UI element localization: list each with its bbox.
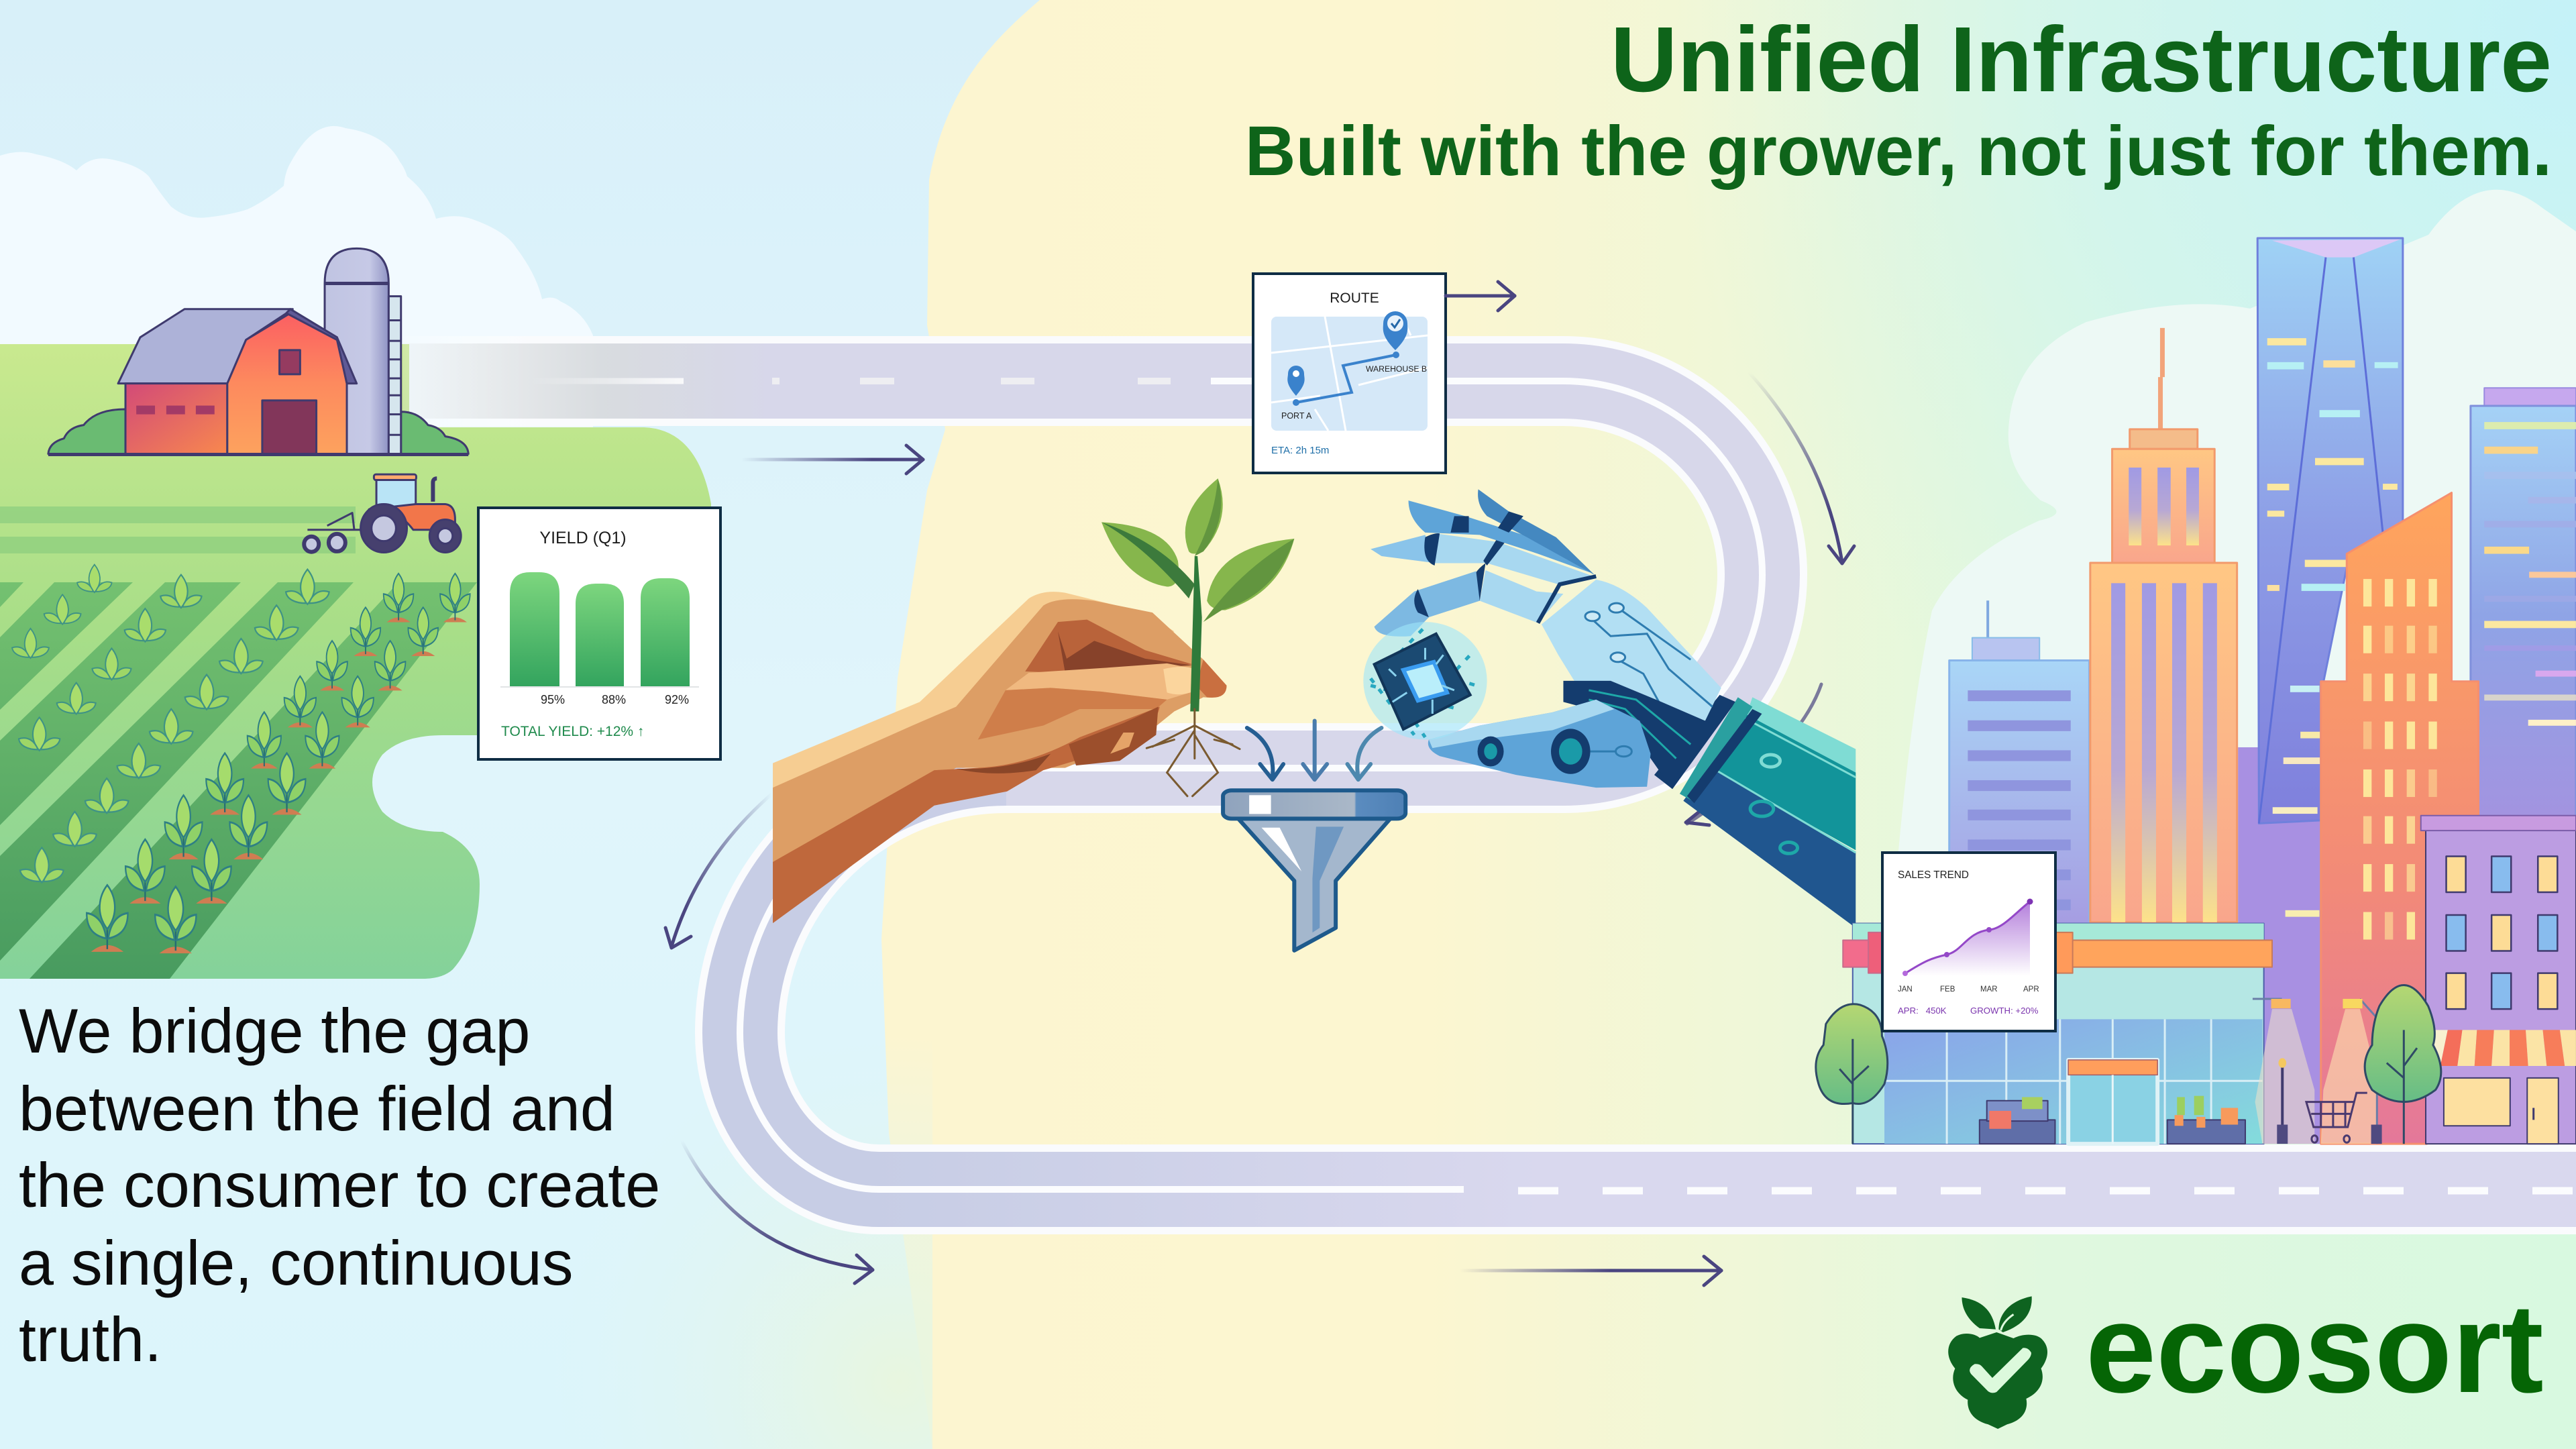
body text: a single, continuous	[19, 1228, 573, 1298]
robot arm and hand	[1371, 489, 1856, 928]
tree: left	[1816, 1004, 1888, 1144]
AI chip with glow	[1363, 622, 1487, 740]
arrow: top road direction	[741, 445, 923, 474]
plants: young sprouts	[12, 565, 329, 883]
plants: rows with soil mounds	[87, 574, 470, 953]
human hand holding seedling	[773, 592, 1227, 923]
card: yield chart: TOTAL YIELD: +12% ↑	[501, 724, 644, 739]
arrow: lower left curve	[682, 1140, 873, 1283]
card: sales trend: FEB	[1940, 985, 1955, 994]
farm field	[0, 344, 711, 979]
arrow: behind robot hand	[1686, 684, 1821, 825]
crop rows	[0, 582, 477, 979]
seedling	[1102, 478, 1294, 796]
tractor	[304, 474, 461, 552]
logo wordmark: ecosort	[2086, 1278, 2544, 1419]
card: sales trend: GROWTH: +20%	[1970, 1006, 2039, 1016]
street furniture	[2253, 999, 2382, 1144]
funnel input arrows	[1247, 720, 1381, 780]
body text: truth.	[19, 1304, 162, 1375]
arrow: right curve	[1749, 372, 1854, 564]
body text: between the field and	[19, 1073, 615, 1144]
body text: We bridge the gap	[19, 996, 530, 1066]
subtitle: Built with the grower, not just for them.	[1245, 112, 2552, 191]
card: yield chart	[478, 508, 720, 759]
card: sales trend: SALES TREND	[1898, 869, 1969, 881]
card: yield chart: 92%	[665, 693, 689, 706]
card: yield chart: 95%	[541, 693, 565, 706]
card: sales trend: APR	[2023, 985, 2039, 994]
card: route map	[1253, 274, 1446, 473]
title: Unified Infrastructure	[1611, 8, 2552, 111]
body text: the consumer to create	[19, 1150, 660, 1220]
funnel	[1223, 790, 1405, 951]
arrow: left curve	[665, 794, 771, 948]
city skyline	[1949, 238, 2576, 1144]
card: sales trend	[1882, 853, 2055, 1031]
arrow: bottom road direction	[1460, 1256, 1721, 1285]
card: sales trend: APR: 450K	[1898, 1006, 1947, 1016]
card: yield chart: YIELD (Q1)	[539, 529, 627, 547]
grocery store	[1843, 923, 2272, 1144]
tree: right	[2365, 985, 2441, 1144]
cloud: farm sky	[0, 126, 593, 429]
card: route map: ETA: 2h 15m	[1271, 445, 1329, 456]
arrow: from route card	[1446, 282, 1515, 311]
purple apartment shop	[2421, 816, 2576, 1144]
card: sales trend: MAR	[1980, 985, 1998, 994]
card: route map: PORT A	[1281, 411, 1312, 421]
card: yield chart: 88%	[602, 693, 626, 706]
barn and silo	[48, 248, 468, 455]
field furrow bands	[0, 506, 356, 553]
cloud: city sky	[1894, 190, 2576, 1140]
card: route map: ROUTE	[1330, 290, 1379, 306]
road	[402, 381, 2576, 1191]
card: sales trend: JAN	[1898, 985, 1913, 994]
logo icon	[1948, 1296, 2047, 1429]
card: route map: WAREHOUSE B	[1366, 364, 1427, 374]
